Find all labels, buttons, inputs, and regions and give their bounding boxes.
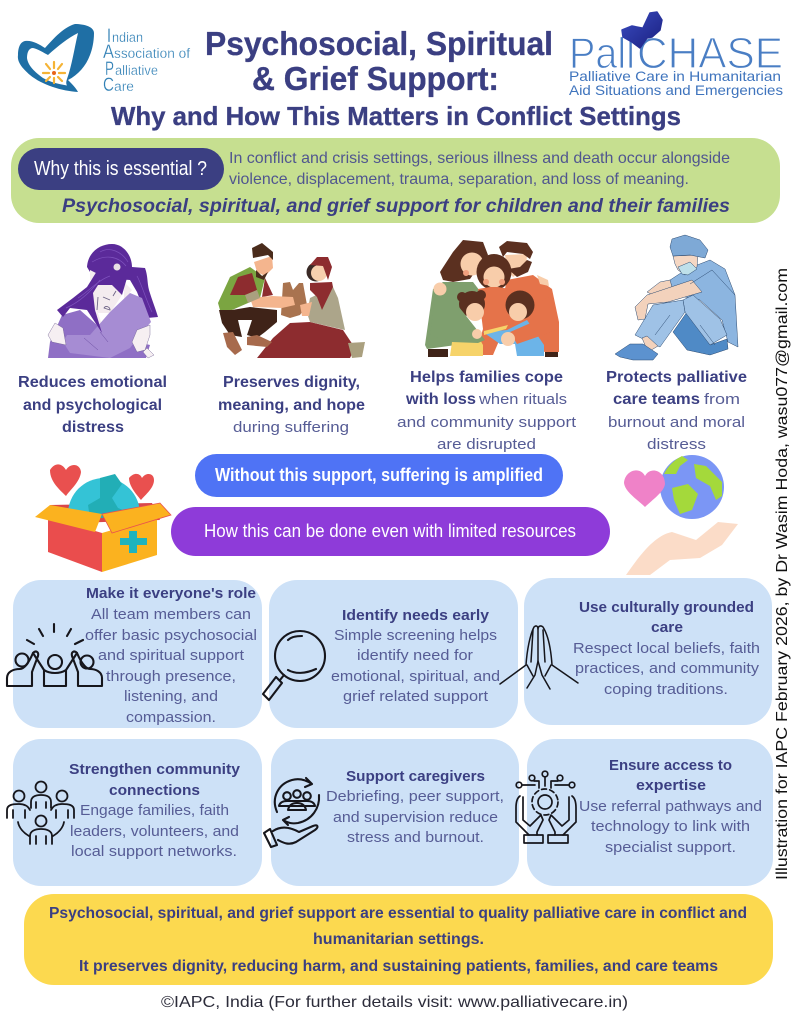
- title: Psychosocial, Spiritual: [205, 25, 553, 62]
- callout: closing message: humanitarian settings.: [313, 931, 484, 948]
- logo: PallCHASE: [569, 12, 783, 98]
- panel: make it everyone's role: [13, 580, 262, 728]
- text: strengthen community connections: [69, 762, 240, 860]
- text: support caregivers: stress and burnout.: [347, 829, 484, 846]
- text: benefit 4: from: [704, 391, 740, 408]
- pill: why this is essential: Why this is essential ?: [34, 158, 207, 180]
- text: strengthen community connections: Engage families, faith: [80, 802, 229, 819]
- callout: without this support: Without this support, suffering is amplified: [215, 465, 543, 485]
- text: benefit 3: when rituals: [478, 391, 567, 408]
- text: support caregivers: Debriefing, peer support,: [326, 788, 504, 805]
- panel: strengthen community connections: [13, 739, 262, 886]
- icon: magnifying glass: [263, 631, 325, 700]
- text: benefit 3: and community support: [397, 414, 577, 431]
- text: use culturally grounded care: coping traditions.: [604, 681, 728, 698]
- text: make it everyone's role: Make it everyone's role: [86, 586, 256, 602]
- text: benefit 4: care teams: [613, 391, 700, 408]
- footer credit: ©IAPC, India (For further details visit: www.palliativecare.in): [161, 994, 628, 1011]
- text: benefit 3: [397, 369, 577, 453]
- text: make it everyone's role: [85, 586, 257, 726]
- text: benefit 4: burnout and moral: [608, 414, 745, 431]
- text: benefit 2: during suffering: [233, 419, 349, 436]
- logo: Indian Association of Palliative Care: alliative: [115, 63, 158, 78]
- text: ensure access to expertise: Ensure access to: [609, 758, 732, 774]
- text: make it everyone's role: listening, and: [124, 688, 218, 705]
- text: ensure access to expertise: [579, 758, 762, 856]
- text: make it everyone's role: offer basic psychosocial: [85, 627, 257, 644]
- panel: ensure access to expertise: [527, 739, 773, 886]
- text: benefit 1: Reduces emotional: [18, 374, 167, 391]
- title: [111, 25, 681, 131]
- text: use culturally grounded care: Use culturally grounded: [579, 600, 754, 616]
- illustration: aid worker giving bag to woman: [218, 243, 365, 358]
- text: make it everyone's role: through presence,: [106, 668, 236, 685]
- callout: without this support: [195, 454, 563, 497]
- illustration: care box with globe and hearts: [35, 464, 171, 572]
- text: strengthen community connections: local support networks.: [71, 843, 237, 860]
- panel: use culturally grounded care: [524, 578, 772, 725]
- illustration: two women hugging: [48, 244, 158, 358]
- text: panel subheading: Psychosocial, spiritual, and grief support for children and their families: [62, 196, 730, 217]
- panel: why this is essential: [11, 138, 780, 223]
- callout: closing message: It preserves dignity, reducing harm, and sustaining patients, families, and care teams: [79, 958, 718, 975]
- text: ensure access to expertise: specialist support.: [605, 839, 736, 856]
- callout: how this can be done: [171, 507, 610, 556]
- vertical illustration credit: Illustration for IAPC February 2026, by Dr Wasim Hoda, wasu077@gmail.com: [774, 268, 791, 880]
- text: ensure access to expertise: expertise: [636, 778, 706, 794]
- text: use culturally grounded care: [573, 600, 760, 698]
- illustration: tired nurse sitting: [615, 235, 738, 360]
- text: benefit 2: Preserves dignity,: [223, 374, 360, 391]
- logo: Indian Association of Palliative Care: are: [114, 79, 134, 94]
- text: support caregivers: Support caregivers: [346, 769, 485, 785]
- logo: PallCHASE: Palliative Care in Humanitarian: [569, 68, 781, 84]
- text: identify needs early: Identify needs early: [342, 608, 489, 624]
- logo: Indian Association of Palliative Care: ndian: [112, 30, 143, 45]
- callout: how this can be done: How this can be done even with limited resources: [204, 521, 576, 541]
- text: benefit 1: [18, 374, 167, 436]
- text: make it everyone's role: compassion.: [126, 709, 216, 726]
- illustration: hand holding globe and heart: [624, 455, 738, 575]
- text: benefit 1: and psychological: [23, 397, 162, 414]
- text: identify needs early: identify need for: [357, 647, 473, 664]
- logo: PallCHASE: Aid Situations and Emergencies: [569, 82, 783, 98]
- text: benefit 4: distress: [647, 436, 706, 453]
- text: benefit 3: Helps families cope: [410, 369, 563, 386]
- text: strengthen community connections: connections: [109, 783, 200, 799]
- text: strengthen community connections: Strengthen community: [69, 762, 240, 778]
- text: ensure access to expertise: Use referral pathways and: [579, 798, 762, 815]
- text: benefit 3: with loss: [405, 391, 476, 408]
- text: benefit 4: Protects palliative: [606, 369, 747, 386]
- text: benefit 1: distress: [62, 419, 124, 436]
- icon: team with raised hands: [7, 624, 102, 686]
- text: why paragraph: violence, displacement, trauma, separation, and loss of meaning.: [229, 171, 689, 188]
- pill: why this is essential: [18, 148, 224, 190]
- text: identify needs early: grief related support: [343, 688, 489, 705]
- text: strengthen community connections: leaders, volunteers, and: [70, 823, 239, 840]
- title: Why and How This Matters in Conflict Settings: [111, 101, 681, 131]
- text: identify needs early: emotional, spiritual, and: [331, 668, 500, 685]
- logo: Indian Association of Palliative Care: P: [105, 59, 114, 80]
- text: benefit 3: are disrupted: [437, 436, 536, 453]
- text: support caregivers: [326, 769, 504, 846]
- text: benefit 4: [606, 369, 747, 453]
- text: identify needs early: [331, 608, 500, 705]
- text: support caregivers: and supervision reduce: [333, 809, 498, 826]
- icon: hand holding caregiver group: [264, 778, 319, 847]
- icon: praying hands: [500, 626, 578, 689]
- logo: Indian Association of Palliative Care: ssociation of: [114, 46, 190, 61]
- logo: PallCHASE: Pall: [569, 29, 635, 78]
- logo: Indian Association of Palliative Care: I: [107, 26, 111, 47]
- text: use culturally grounded care: Respect local beliefs, faith: [573, 640, 760, 657]
- icon: community group: [7, 782, 74, 844]
- text: benefit 2: meaning, and hope: [218, 397, 365, 414]
- text: make it everyone's role: and spiritual support: [98, 647, 245, 664]
- logo: Indian Association of Palliative Care: A: [103, 42, 114, 63]
- panel: identify needs early: [269, 580, 518, 728]
- text: use culturally grounded care: care: [651, 620, 683, 636]
- text: ensure access to expertise: technology to link with: [591, 818, 750, 835]
- text: identify needs early: Simple screening helps: [334, 627, 497, 644]
- text: use culturally grounded care: practices, and community: [575, 660, 760, 677]
- text: why paragraph: [229, 150, 730, 188]
- callout: closing message: [24, 894, 773, 985]
- callout: closing message: Psychosocial, spiritual, and grief support are essential to quality palliative care in conflict and: [49, 905, 747, 922]
- illustration: family embracing: [425, 240, 559, 357]
- logo: PallCHASE: CHASE: [637, 29, 783, 78]
- logo: Indian Association of Palliative Care: [18, 24, 190, 96]
- text: make it everyone's role: All team members can: [91, 606, 251, 623]
- logo: Indian Association of Palliative Care: C: [103, 75, 114, 96]
- text: benefit 2: [218, 374, 365, 436]
- icon: hands holding gear with circuit nodes: [516, 771, 576, 843]
- text: why paragraph: In conflict and crisis settings, serious illness and death occur alongside: [229, 150, 730, 167]
- panel: support caregivers: [271, 739, 519, 886]
- title: & Grief Support:: [252, 60, 499, 97]
